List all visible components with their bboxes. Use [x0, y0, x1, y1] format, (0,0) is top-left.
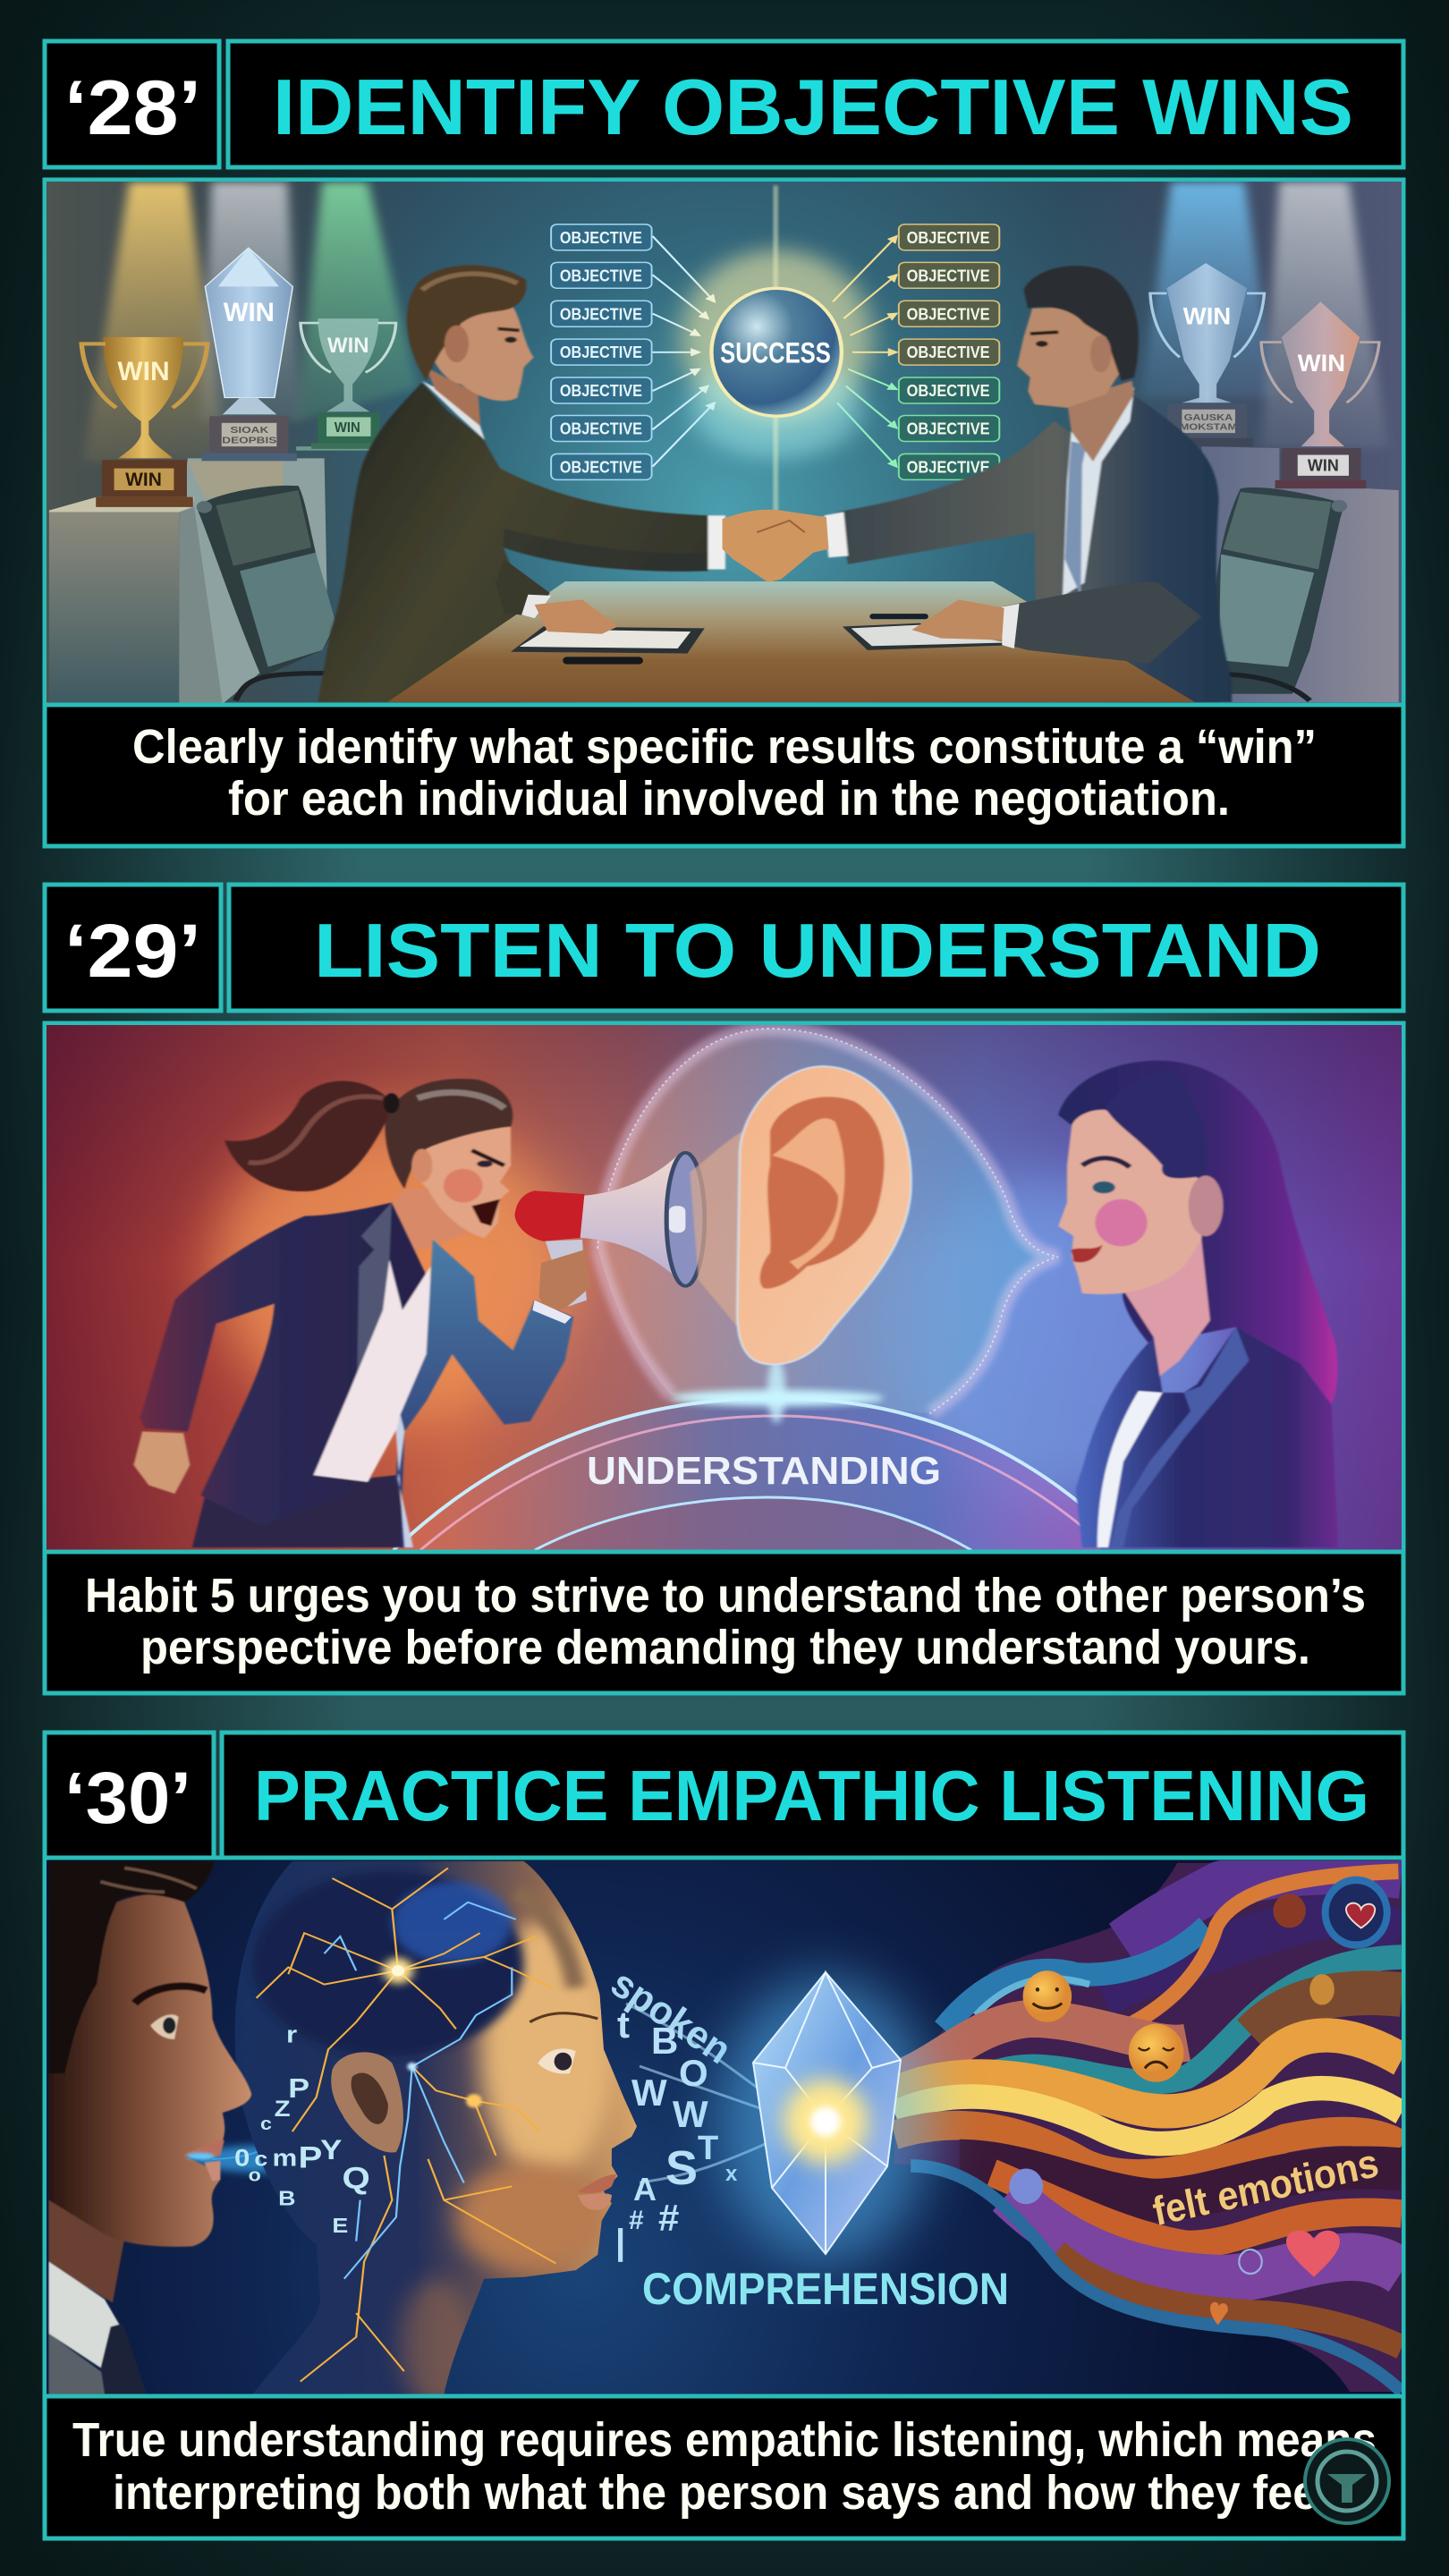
- objectives right labels: OBJECTIVE: [907, 419, 990, 438]
- person: speaking man and neural woman: [48, 1861, 637, 2409]
- trophy: crystal win: [201, 248, 297, 461]
- floating letters right: [603, 1962, 739, 2262]
- right half scene: [682, 182, 1399, 702]
- floating letters right: t: [617, 2004, 630, 2046]
- success orb: [682, 186, 872, 515]
- number box 30: ‘30’: [64, 1758, 191, 1839]
- understanding arc: [394, 1359, 1100, 1550]
- blue nerve lines: [324, 1902, 516, 2279]
- floating letters left: B: [278, 2187, 295, 2210]
- crystal: [718, 1972, 933, 2263]
- label: felt emotions: felt emotions: [1149, 2140, 1382, 2234]
- spoken glow: [192, 2084, 336, 2173]
- floating letters right: B: [651, 2020, 678, 2062]
- floating letters left: m: [272, 2145, 297, 2172]
- arrows right: [833, 236, 896, 467]
- megaphone: [515, 1153, 705, 1324]
- objectives right labels: OBJECTIVE: [907, 266, 990, 285]
- logo badge: [1305, 2439, 1389, 2523]
- objectives right: [899, 225, 999, 479]
- understanding arc: UNDERSTANDING: [587, 1449, 941, 1493]
- spotlights right: [1140, 182, 1388, 448]
- table: [387, 581, 1195, 702]
- person: right man: [824, 266, 1232, 702]
- ear and right woman scene: [690, 1061, 1338, 1547]
- emoji: crying: [1009, 2168, 1043, 2204]
- trophy: right rose crystal: WIN: [1308, 457, 1339, 475]
- caption 29: [45, 1552, 1403, 1693]
- floating letters left: Q: [343, 2160, 370, 2195]
- trophy: glass win: WIN: [327, 333, 369, 357]
- floating letters right: #: [658, 2197, 679, 2239]
- panel: 29 listen to understand: [45, 885, 1403, 1693]
- spotlights left: [84, 182, 418, 462]
- heading: identify objective wins: [228, 41, 1403, 167]
- floating letters left: P: [298, 2140, 322, 2174]
- floating letters left: Z: [275, 2096, 291, 2121]
- trophy: right crystal cup: GAUSKA: [1184, 413, 1233, 423]
- person: neural woman head: [235, 1861, 637, 2409]
- trophy: right crystal cup: WIN: [1183, 302, 1231, 330]
- floating letters right: W: [631, 2072, 667, 2114]
- trophy: glass win: WIN: [335, 419, 360, 435]
- trophy: gold win: WIN: [117, 357, 170, 386]
- caption 28: Clearly identify what specific results constitute a “win”: [132, 720, 1317, 774]
- trophy: right crystal cup: [1150, 263, 1264, 446]
- trophy: crystal win: SIOAK: [230, 425, 268, 436]
- small icons: [1210, 1880, 1387, 2325]
- illustration: megaphone and ear: [45, 1023, 1403, 1553]
- neural sparks: [383, 1958, 482, 2107]
- trophy: gold win: [81, 337, 208, 507]
- pedestals right: [1201, 446, 1399, 702]
- ear: [331, 2052, 403, 2152]
- chair right: [1166, 487, 1347, 700]
- heading: practice empathic listening: [222, 1733, 1403, 1858]
- caption 30: interpreting both what the person says and how they feel.: [113, 2466, 1343, 2520]
- floating letters left: 0: [234, 2145, 250, 2172]
- objectives left labels: OBJECTIVE: [560, 304, 642, 324]
- objectives right labels: OBJECTIVE: [907, 228, 990, 247]
- objectives right labels: OBJECTIVE: [907, 304, 990, 324]
- objectives left labels: OBJECTIVE: [560, 343, 642, 362]
- number box 28: ‘28’: [64, 65, 201, 151]
- objectives right labels: OBJECTIVE: [907, 457, 990, 477]
- emotion waves: [894, 1863, 1402, 2392]
- floating letters right: O: [679, 2052, 708, 2094]
- objectives left labels: OBJECTIVE: [560, 381, 642, 400]
- left arm on table: [496, 559, 705, 665]
- label: comprehension: COMPREHENSION: [642, 2264, 1009, 2314]
- icon: heart: [1286, 2231, 1340, 2277]
- objectives left labels: [560, 228, 642, 477]
- success orb: SUCCESS: [720, 336, 831, 369]
- person: shouting woman: [133, 1079, 705, 1547]
- floating letters right: x: [725, 2162, 738, 2186]
- trophy: right rose crystal: [1261, 301, 1379, 488]
- ponytail and hair: [225, 1079, 513, 1191]
- number box 29: [45, 885, 221, 1011]
- document right: [843, 614, 1015, 650]
- floating letters right: |: [615, 2223, 625, 2262]
- floating letters left: r: [286, 2022, 297, 2048]
- face details: [530, 2013, 616, 2210]
- caption 30: [45, 2396, 1403, 2538]
- objectives left: [551, 225, 652, 479]
- head: [387, 1127, 511, 1259]
- objectives left labels: OBJECTIVE: [560, 228, 642, 247]
- objectives left labels: OBJECTIVE: [560, 457, 642, 477]
- objectives left labels: OBJECTIVE: [560, 266, 642, 285]
- floating letters left: c: [254, 2148, 267, 2171]
- panel: 30 practice empathic listening: [45, 1733, 1403, 2538]
- pedestals left: [49, 446, 370, 704]
- floating letters right: W: [673, 2093, 708, 2135]
- ear: [690, 1066, 911, 1365]
- chair left: [197, 485, 335, 701]
- objectives right labels: OBJECTIVE: [907, 343, 990, 362]
- number box 28: [45, 41, 219, 167]
- floating letters left: E: [332, 2215, 348, 2238]
- person: left man: [318, 265, 725, 702]
- heading: identify objective wins: IDENTIFY OBJECTIVE WINS: [273, 63, 1353, 151]
- floating letters left: [234, 2022, 370, 2238]
- number box 29: ‘29’: [64, 909, 201, 993]
- person: speaking man: [48, 1861, 251, 2394]
- floating letters right: T: [698, 2130, 718, 2167]
- arrows left: [653, 236, 715, 467]
- caption 28: [45, 705, 1403, 846]
- jacket: [133, 1202, 573, 1547]
- trophy: crystal win: DEOPBIS: [222, 435, 276, 445]
- trophy: right crystal cup: MOKSTAM: [1180, 423, 1237, 432]
- left half scene: [49, 182, 725, 704]
- document left: [511, 626, 705, 665]
- trophy: gold win: WIN: [125, 470, 162, 490]
- illustration: handshake and objectives: [45, 180, 1403, 705]
- neural lines: [257, 1868, 555, 2382]
- objectives right labels: [907, 228, 990, 477]
- floating letters right: S: [665, 2141, 698, 2195]
- objectives right labels: OBJECTIVE: [907, 381, 990, 400]
- caption 29: perspective before demanding they understand yours.: [140, 1621, 1310, 1674]
- illustration: empathic listening: [45, 1858, 1403, 2409]
- floating letters right: A: [633, 2171, 657, 2207]
- sound bubble: [597, 1029, 1058, 1413]
- trophy: crystal win: WIN: [224, 298, 275, 327]
- floating letters left: c: [260, 2114, 272, 2134]
- panel: 28 identify objective wins: [45, 41, 1403, 846]
- handshake: [723, 510, 828, 582]
- heading: practice empathic listening: PRACTICE EMPATHIC LISTENING: [254, 1756, 1369, 1835]
- right arm on table: [843, 582, 1201, 664]
- floating letters left: P: [288, 2073, 309, 2104]
- caption 28: for each individual involved in the negotiation.: [228, 772, 1230, 826]
- caption 29: Habit 5 urges you to strive to understand the other person’s: [85, 1569, 1366, 1623]
- person: listening woman: [1058, 1061, 1338, 1547]
- floating letters right: spoken: [603, 1962, 739, 2072]
- spoken wisps: [626, 2004, 805, 2182]
- trophy: right rose crystal: WIN: [1298, 350, 1345, 377]
- trophy: glass win: [301, 318, 396, 449]
- emoji: happy: [1023, 1970, 1072, 2022]
- heading: listen to understand: LISTEN TO UNDERSTAND: [314, 909, 1321, 994]
- heading: listen to understand: [229, 885, 1403, 1011]
- objectives left labels: OBJECTIVE: [560, 419, 642, 438]
- floating letters left: o: [249, 2165, 261, 2185]
- floating letters left: Y: [320, 2134, 343, 2165]
- number box 30: [45, 1733, 214, 1858]
- emoji: sad: [1129, 2024, 1184, 2082]
- floating letters right: #: [629, 2206, 644, 2235]
